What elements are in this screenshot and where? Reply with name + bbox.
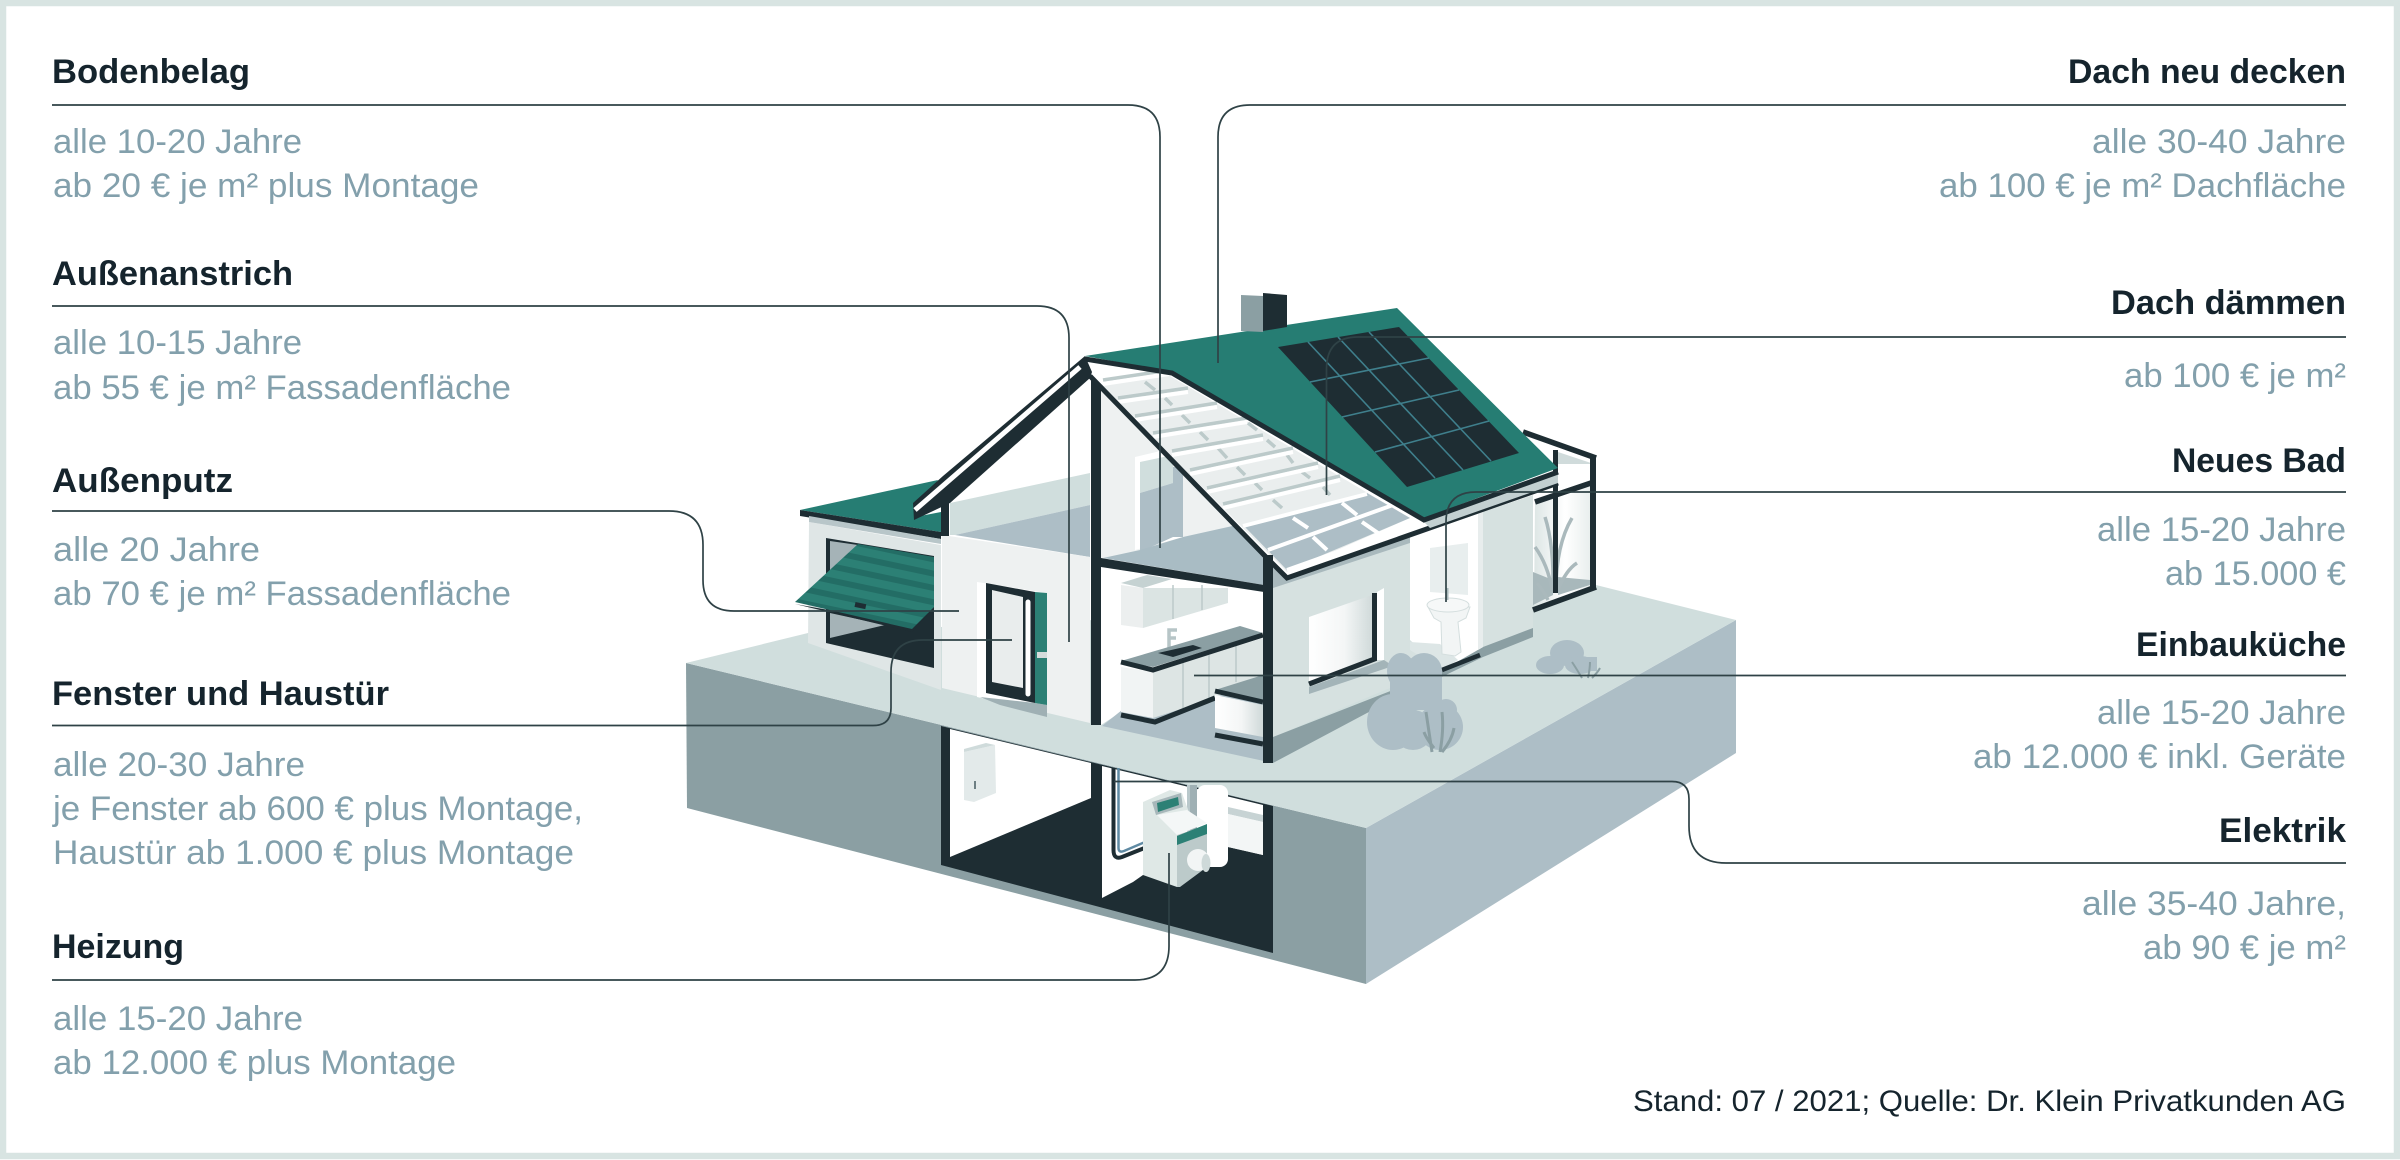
details: alle 35-40 Jahre,	[2082, 885, 2346, 923]
faucet	[1169, 630, 1177, 648]
heading: Dach dämmen	[2111, 284, 2346, 322]
kitchen island	[1215, 675, 1263, 744]
details: alle 15-20 Jahre	[2097, 511, 2346, 549]
details: ab 70 € je m² Fassadenfläche	[53, 575, 511, 613]
ground block	[686, 585, 1736, 984]
heating unit	[1143, 790, 1210, 887]
front door	[986, 583, 1047, 705]
leader line	[52, 511, 959, 611]
bathroom	[1410, 512, 1483, 670]
callout: Bodenbelag	[52, 53, 1160, 548]
floor beam	[1101, 558, 1264, 592]
water tank and wall unit	[1187, 785, 1263, 867]
leader line	[1218, 105, 2346, 363]
leader line	[52, 853, 1169, 980]
callout: Dach neu decken	[1218, 53, 2346, 363]
dividing wall post	[1091, 372, 1101, 725]
details: ab 100 € je m² Dachfläche	[1939, 167, 2346, 205]
heading: Fenster und Haustür	[52, 675, 389, 713]
details	[52, 746, 583, 872]
details	[53, 1000, 456, 1082]
heading: Außenanstrich	[52, 255, 293, 293]
heading: Elektrik	[2219, 812, 2347, 850]
pipes	[1114, 768, 1152, 858]
callout: Elektrik	[1114, 782, 2347, 967]
ground floor kitchen	[1101, 558, 1264, 761]
source note: Stand: 07 / 2021; Quelle: Dr. Klein Privatkunden AG	[1633, 1085, 2346, 1118]
small shrub	[1536, 640, 1600, 678]
callout: Heizung	[52, 853, 1169, 1082]
details	[53, 324, 511, 407]
details: ab 100 € je m²	[2124, 357, 2346, 395]
details: alle 20-30 Jahre	[53, 746, 305, 784]
upper room	[1101, 385, 1264, 585]
garage roof	[800, 480, 941, 544]
details	[1939, 123, 2346, 205]
details: ab 12.000 € plus Montage	[53, 1044, 456, 1082]
leader line	[1446, 492, 2346, 602]
fuse box	[964, 743, 996, 802]
plant	[1535, 517, 1577, 600]
leader line	[52, 306, 1069, 642]
gable wall	[942, 535, 1090, 723]
right exterior wall	[1273, 495, 1533, 763]
callout: Dach dämmen	[1326, 284, 2346, 495]
details: alle 10-15 Jahre	[53, 324, 302, 362]
details: alle 15-20 Jahre	[2097, 694, 2346, 732]
heading: Dach neu decken	[2068, 53, 2346, 91]
basement	[941, 726, 1273, 953]
callout: Fenster und Haustür	[52, 640, 1012, 872]
details: je Fenster ab 600 € plus Montage,	[52, 790, 583, 828]
upper room back wall, left side	[950, 473, 1090, 557]
living room window	[1309, 588, 1393, 694]
details: alle 30-40 Jahre	[2092, 123, 2346, 161]
house cross-section illustration	[686, 293, 1736, 984]
heading: Heizung	[52, 928, 184, 966]
details: alle 10-20 Jahre	[53, 123, 302, 161]
details: ab 55 € je m² Fassadenfläche	[53, 369, 511, 407]
gable roof edge	[913, 356, 1092, 520]
callout: Einbauküche	[1194, 626, 2346, 776]
roof	[1085, 293, 1558, 528]
details: Haustür ab 1.000 € plus Montage	[53, 834, 574, 872]
solar panels	[1278, 327, 1519, 487]
leader line	[1194, 674, 2346, 676]
chimney	[1241, 293, 1287, 332]
callout: Außenputz	[52, 462, 959, 613]
leader line	[52, 640, 1012, 726]
details	[53, 531, 511, 613]
heading: Außenputz	[52, 462, 233, 500]
garage door	[795, 544, 934, 632]
details: ab 90 € je m²	[2143, 929, 2346, 967]
details: alle 15-20 Jahre	[53, 1000, 303, 1038]
details: ab 20 € je m² plus Montage	[53, 167, 479, 205]
details	[53, 123, 479, 205]
details	[2082, 885, 2346, 967]
details	[1973, 694, 2346, 776]
details: ab 15.000 €	[2165, 555, 2346, 593]
conservatory	[1523, 432, 1596, 610]
details: alle 20 Jahre	[53, 531, 260, 569]
heading: Neues Bad	[2172, 442, 2346, 480]
heading: Bodenbelag	[52, 53, 250, 91]
heading: Einbauküche	[2136, 626, 2346, 664]
leader line	[1114, 782, 2346, 863]
callout: Außenanstrich	[52, 255, 1069, 642]
leader line	[52, 105, 1160, 548]
exposed roof rafters	[1085, 365, 1558, 763]
upper cabinets	[1121, 575, 1228, 628]
garage	[795, 480, 941, 690]
leader line	[1326, 337, 2346, 495]
callout: Neues Bad	[1446, 442, 2346, 602]
large shrub	[1367, 653, 1463, 752]
kitchen unit	[1121, 626, 1263, 722]
details	[2097, 511, 2346, 593]
details: ab 12.000 € inkl. Geräte	[1973, 738, 2346, 776]
